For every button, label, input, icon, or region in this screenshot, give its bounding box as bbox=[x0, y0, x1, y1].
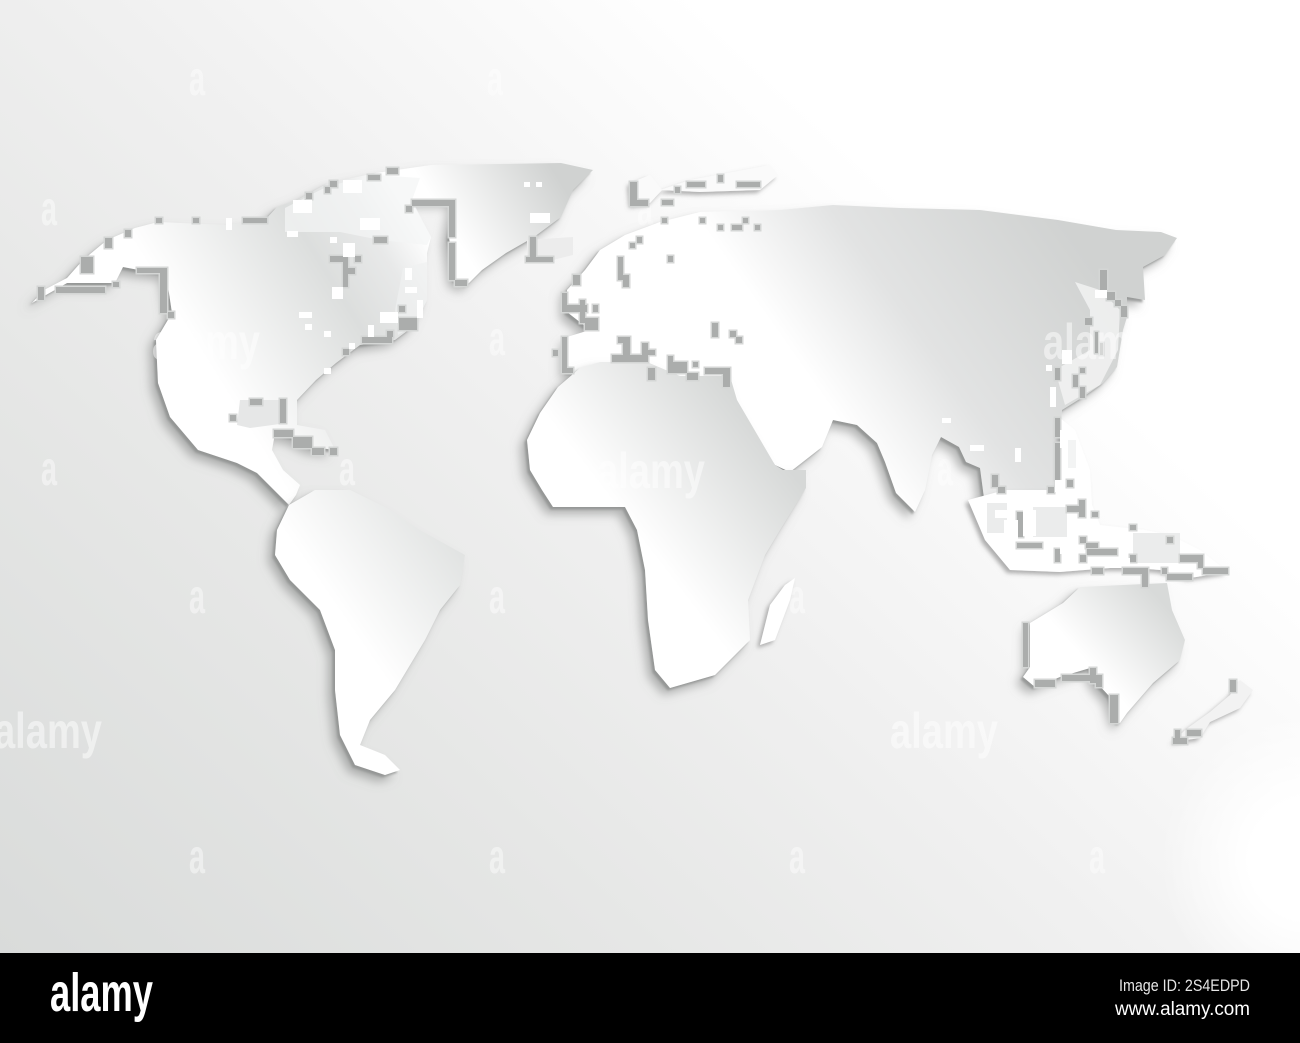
labrador highlight bbox=[395, 262, 427, 335]
faint watermark letters: a bbox=[1237, 443, 1253, 496]
islands: Iceland and Arctic isles bbox=[630, 165, 778, 205]
faint watermark letters: a bbox=[489, 571, 505, 624]
large alamy watermarks: alamy bbox=[152, 314, 260, 370]
pixel highlights bbox=[226, 180, 1130, 566]
faint watermark letters bbox=[41, 53, 1253, 884]
faint watermark letters: a bbox=[789, 571, 805, 624]
islands: Southeast Asia and Philippines bbox=[968, 418, 1228, 578]
faint watermark letters: a bbox=[787, 53, 803, 106]
faint watermark letters: a bbox=[189, 571, 205, 624]
continent: Africa bbox=[527, 362, 806, 688]
faint watermark letters: a bbox=[637, 183, 653, 236]
footer bar bbox=[0, 953, 1300, 1043]
faint watermark letters: a bbox=[937, 183, 953, 236]
faint watermark letters: a bbox=[1237, 183, 1253, 236]
large alamy watermarks: alamy bbox=[1043, 314, 1151, 370]
faint watermark letters: a bbox=[487, 53, 503, 106]
indonesia light patches bbox=[987, 440, 1180, 563]
large alamy watermarks: alamy bbox=[597, 443, 705, 499]
faint watermark letters: a bbox=[339, 443, 355, 496]
faint watermark letters: a bbox=[489, 831, 505, 884]
footer logo: alamy bbox=[50, 963, 153, 1023]
continent: Australia bbox=[1023, 583, 1185, 723]
pixel shading halo and marks bbox=[38, 168, 1236, 744]
faint watermark letters: a bbox=[1087, 53, 1103, 106]
faint watermark letters: a bbox=[41, 183, 57, 236]
faint watermark letters: a bbox=[1089, 571, 1105, 624]
faint watermark letters: a bbox=[189, 53, 205, 106]
light corner bbox=[1100, 680, 1300, 953]
faint watermark letters: a bbox=[937, 443, 953, 496]
faint watermark letters: a bbox=[489, 313, 505, 366]
continent: Eurasia bbox=[567, 205, 1177, 512]
faint watermark letters: a bbox=[41, 443, 57, 496]
faint watermark letters: a bbox=[789, 313, 805, 366]
image id: Image ID: 2S4EDPD bbox=[1119, 976, 1250, 995]
website: www.alamy.com bbox=[1114, 999, 1250, 1020]
east asia coast highlight bbox=[1055, 282, 1120, 405]
large alamy watermarks bbox=[0, 314, 1151, 759]
island: New Zealand bbox=[1173, 680, 1253, 742]
faint watermark letters: a bbox=[789, 831, 805, 884]
faint watermark letters: a bbox=[189, 831, 205, 884]
coastal pixel speckles bbox=[38, 168, 1236, 744]
arctic archipelago highlight bbox=[285, 175, 431, 245]
gulf of mexico bbox=[237, 400, 287, 428]
island: Madagascar bbox=[760, 578, 795, 645]
faint watermark letters: a bbox=[339, 183, 355, 236]
continent: North America and Greenland bbox=[32, 163, 593, 505]
continent: South America bbox=[275, 490, 465, 775]
faint watermark letters: a bbox=[1089, 831, 1105, 884]
island: off Greenland bbox=[527, 237, 573, 260]
large alamy watermarks: alamy bbox=[890, 703, 998, 759]
